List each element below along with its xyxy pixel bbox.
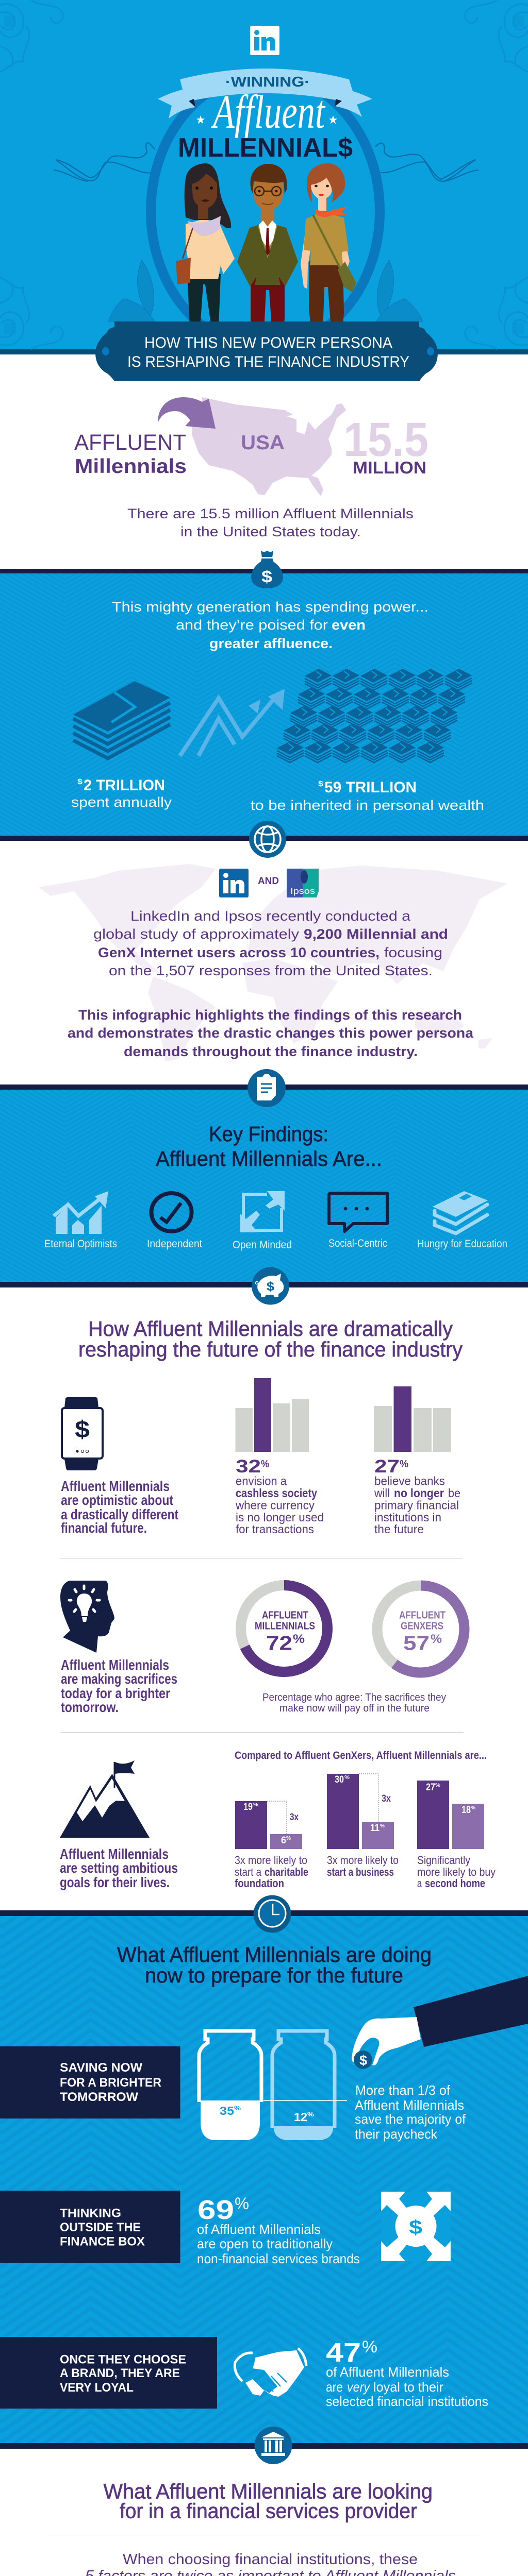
- statement: [127, 506, 414, 539]
- icon: check circle: [152, 1193, 192, 1231]
- label: Eternal Optimists: [44, 1238, 117, 1250]
- study description: LinkedIn and Ipsos recently conducted a: [130, 908, 411, 924]
- bar chart: second home: Significantly: [417, 1854, 470, 1867]
- donut: affluent millennials 72 percent: [241, 1585, 327, 1672]
- stat: 47 percent: of Affluent Millennials: [326, 2364, 449, 2380]
- panel: spending power: [0, 551, 528, 858]
- jar: 35 percent: 35: [220, 2104, 234, 2117]
- stat: cashless society: for transactions: [236, 1522, 314, 1536]
- heading: what they look for: [103, 2479, 433, 2522]
- heading text: [112, 599, 428, 651]
- stat: 47 percent: [326, 2337, 488, 2409]
- stat: 69 percent: of Affluent Millennials: [197, 2222, 321, 2237]
- bar chart: start a business: 30: [335, 1774, 344, 1785]
- stat: banks: primary financial: [374, 1498, 459, 1512]
- highlights statement: This infographic highlights the findings of this research: [78, 1007, 462, 1023]
- icon: handshake: [235, 2348, 306, 2397]
- stat: banks: %: [400, 1459, 408, 1470]
- statement: in the United States today.: [180, 524, 361, 539]
- heading text: and they’re poised for: [176, 617, 328, 633]
- icon: smart watch: $: [75, 1416, 90, 1443]
- bar chart: charitable foundation: %: [253, 1802, 258, 1808]
- icon: document: [248, 1069, 286, 1107]
- icon: large cash stack: [73, 681, 170, 758]
- usa label: USA: [241, 432, 285, 454]
- stat: 59 trillion: to be inherited in personal wealth: [251, 798, 484, 813]
- stat: 69 percent: are open to traditionally: [197, 2236, 333, 2251]
- donut: affluent genxers 57 percent: [377, 1586, 464, 1672]
- label: Open Minded: [233, 1239, 292, 1251]
- stat: 2 trillion: spent annually: [71, 794, 172, 810]
- icon: arrows outward with dollar: [381, 2192, 451, 2261]
- stat: cashless society: [235, 1456, 324, 1536]
- icon: clock: [254, 1895, 291, 1933]
- bar chart: start a business: start a business: [327, 1866, 394, 1878]
- icon: head with light bulb: [60, 1581, 114, 1653]
- usa map: [192, 397, 346, 496]
- banner: IS RESHAPING THE FINANCE INDUSTRY: [127, 353, 409, 370]
- intro text: [85, 2551, 456, 2576]
- stat: 2 trillion: 2 TRILLION: [84, 777, 165, 794]
- saving statement: their paycheck: [355, 2126, 438, 2142]
- chart title: Compared to Affluent GenXers, Affluent Millennials are...: [235, 1750, 487, 1761]
- bar chart: charitable foundation: charitable: [265, 1866, 308, 1878]
- statement: [61, 1657, 177, 1715]
- study description: GenX Internet users across 10 countries,: [98, 945, 380, 960]
- bar chart: second home: second home: [425, 1877, 485, 1890]
- heading text: greater affluence.: [209, 636, 333, 651]
- label: Independent: [147, 1238, 202, 1250]
- ornament: leaves: [108, 260, 423, 321]
- chart caption: [262, 1692, 446, 1714]
- stat: 59 trillion: [251, 779, 484, 813]
- stat: cashless society: cashless society: [236, 1486, 317, 1500]
- icon: hand with coin: [352, 1976, 528, 2069]
- bar chart: start a business: 3x more likely to: [327, 1854, 399, 1867]
- heading: What Affluent Millennials are doing: [117, 1943, 432, 1967]
- statement: Affluent Millennials: [61, 1478, 170, 1494]
- bar chart: second home: %: [435, 1783, 440, 1788]
- label box: saving now: SAVING NOW: [60, 2061, 142, 2075]
- stat: 69 percent: %: [235, 2194, 249, 2213]
- stat: 47 percent: %: [362, 2337, 377, 2356]
- bar chart: start a business: %: [344, 1775, 350, 1781]
- stat: 47 percent: very: [347, 2379, 371, 2395]
- stat: 59 trillion: 59 TRILLION: [324, 779, 417, 796]
- label box: saving now: [0, 2046, 180, 2119]
- heading: [156, 1122, 382, 1171]
- bar chart: 27 percent: [374, 1386, 451, 1452]
- bar chart: charitable foundation: %: [286, 1836, 291, 1841]
- bar chart: second home: more likely to buy: [417, 1866, 496, 1878]
- label box: loyalty: ONCE THEY CHOOSE: [60, 2352, 186, 2367]
- stat: 2 trillion: $: [77, 777, 83, 786]
- statement: tomorrow.: [61, 1699, 119, 1715]
- bar chart: charitable foundation: 19: [243, 1802, 253, 1812]
- panel: making sacrifices: [60, 1581, 464, 1715]
- label box: loyalty: A BRAND, THEY ARE: [60, 2366, 180, 2380]
- finding: hungry for education: [417, 1191, 507, 1250]
- heading: what they look for: What Affluent Millennials are looking: [103, 2479, 433, 2503]
- panel: ambitious goals: [60, 1750, 496, 1890]
- bar chart: charitable foundation: 3x: [290, 1812, 299, 1823]
- stat: 69 percent: non-financial services brands: [197, 2251, 360, 2266]
- icon: bank: [255, 2427, 292, 2464]
- panel: research study: [39, 864, 508, 1061]
- bar chart: second home: 18: [461, 1805, 471, 1816]
- header panel: [0, 0, 528, 381]
- icon: money bag: [251, 551, 283, 588]
- label box: loyalty: [0, 2337, 217, 2409]
- study description: [93, 908, 448, 978]
- saving statement: [355, 2082, 466, 2142]
- stat: cashless society: is no longer used: [236, 1511, 324, 1524]
- affluent millennials label: AFFLUENT: [74, 430, 186, 455]
- stat: cashless society: 32: [236, 1456, 261, 1477]
- donut: affluent genxers 57 percent: GENXERS: [401, 1621, 443, 1632]
- ribbon: [158, 69, 372, 118]
- label box: thinking outside: [0, 2191, 180, 2263]
- bar chart: charitable foundation: start a: [235, 1866, 262, 1878]
- stat: banks: [374, 1456, 460, 1536]
- linkedin logo: [250, 26, 279, 55]
- bar chart: second home: 27: [426, 1782, 435, 1793]
- bar chart: start a business: 3x: [382, 1793, 391, 1804]
- icon: expanding square: [240, 1191, 285, 1232]
- stat: cashless society: %: [261, 1459, 269, 1470]
- heading: reshaping the finance industry: [78, 1317, 463, 1361]
- bar chart: charitable foundation: [235, 1801, 308, 1890]
- heading: Affluent Millennials Are...: [156, 1147, 382, 1171]
- highlights statement: demands throughout the finance industry.: [124, 1044, 418, 1059]
- statement: are making sacrifices: [61, 1671, 177, 1687]
- panel: five factors: [60, 2551, 475, 2576]
- bar chart: second home: [417, 1781, 496, 1890]
- ribbon text: ·WINNING·: [225, 74, 310, 90]
- character: woman right: [301, 163, 356, 350]
- stat: banks: be: [448, 1486, 460, 1500]
- heading: now to prepare for the future: [145, 1963, 403, 1987]
- bar chart: charitable foundation: 6: [281, 1835, 286, 1846]
- stat: cashless society: envision a: [236, 1475, 287, 1488]
- stars: [196, 115, 337, 124]
- statement: goals for their lives.: [60, 1874, 170, 1890]
- script title: Affluent: [211, 86, 326, 138]
- donut: affluent genxers 57 percent: 57: [403, 1633, 430, 1655]
- stat: banks: no longer: [394, 1486, 444, 1500]
- 15.5 million: 15.5: [343, 413, 428, 466]
- bar chart: charitable foundation: 3x more likely to: [235, 1854, 307, 1867]
- stat: 47 percent: are: [326, 2379, 343, 2395]
- icon: money bag: $: [261, 567, 272, 586]
- bar chart: start a business: 11: [370, 1823, 380, 1834]
- donut: affluent millennials 72 percent: AFFLUENT: [262, 1609, 308, 1621]
- stat: banks: 27: [374, 1456, 400, 1477]
- ornament: side ribbons: [54, 143, 478, 181]
- panel: preparing for the future: [0, 1895, 528, 2464]
- statement: a drastically different: [61, 1506, 178, 1522]
- study description: on the 1,507 responses from the United States.: [109, 963, 433, 978]
- heading: reshaping the finance industry: reshaping the future of the finance industry: [78, 1337, 463, 1361]
- affluent millennials label: Millennials: [75, 455, 187, 478]
- heading text: This mighty generation has spending power...: [112, 599, 428, 615]
- bar chart: second home: %: [471, 1805, 475, 1811]
- and label: AND: [258, 876, 279, 887]
- icon: piggy bank: $: [267, 1280, 275, 1294]
- stat: banks: believe banks: [374, 1475, 445, 1488]
- jar: 12 percent: [272, 2031, 335, 2140]
- intro text: When choosing financial institutions, these: [123, 2551, 418, 2568]
- stat: banks: will: [374, 1486, 390, 1500]
- stat: 47 percent: selected financial institutions: [326, 2394, 488, 2409]
- icon: grid of cash stacks: [277, 669, 472, 762]
- stat: 47 percent: loyal to their: [373, 2379, 443, 2395]
- finding: independent: [147, 1193, 202, 1250]
- oval frame: [151, 74, 380, 348]
- stat: 69 percent: [197, 2194, 360, 2266]
- label box: saving now: FOR A BRIGHTER: [60, 2076, 161, 2090]
- saving statement: Affluent Millennials: [355, 2097, 464, 2113]
- jar: 12 percent: 12: [294, 2110, 307, 2124]
- jar: 12 percent: %: [307, 2111, 314, 2118]
- statement: are setting ambitious: [60, 1860, 178, 1876]
- stat: 2 trillion: [71, 777, 172, 810]
- heading: Key Findings:: [209, 1122, 328, 1146]
- donut: affluent millennials 72 percent: %: [293, 1632, 305, 1646]
- study description: global study of approximately: [93, 926, 300, 942]
- bar chart: start a business: %: [380, 1823, 385, 1829]
- stat: 69 percent: 69: [197, 2195, 234, 2225]
- panel: key findings: [0, 1069, 528, 1304]
- chart caption: make now will pay off in the future: [279, 1703, 430, 1714]
- label box: thinking outside: THINKING: [60, 2207, 121, 2221]
- finding: social-centric: [328, 1193, 387, 1249]
- bar chart: 32 percent: [235, 1378, 309, 1452]
- icon: speech tablet: [329, 1193, 387, 1231]
- saving statement: More than 1/3 of: [355, 2082, 451, 2098]
- icon: books: [433, 1191, 488, 1233]
- icon: smart watch: [62, 1397, 103, 1470]
- character: man: [237, 164, 298, 351]
- label box: thinking outside: OUTSIDE THE: [60, 2221, 141, 2234]
- donut: affluent genxers 57 percent: %: [431, 1632, 442, 1646]
- banner text: HOW THIS NEW POWER PERSONA: [144, 334, 392, 351]
- stat: banks: the future: [374, 1522, 424, 1536]
- label box: saving now: TOMORROW: [60, 2090, 138, 2104]
- icon: globe: [249, 821, 286, 858]
- finding: eternal optimists: [44, 1191, 117, 1250]
- icon: piggy bank: [252, 1267, 289, 1304]
- icon: mountain with flag: [60, 1760, 150, 1838]
- saving statement: save the majority of: [355, 2111, 466, 2127]
- character: woman left: [176, 163, 235, 328]
- statement: [60, 1846, 178, 1890]
- panel: optimistic about future: [61, 1378, 460, 1536]
- heading text: even: [332, 617, 366, 633]
- world map: [39, 864, 508, 1061]
- study description: focusing: [384, 945, 442, 960]
- icon: arrows outward with dollar: $: [409, 2217, 422, 2239]
- donut: affluent genxers 57 percent: AFFLUENT: [399, 1609, 446, 1621]
- chart caption: Percentage who agree: The sacrifices they: [262, 1692, 446, 1703]
- statement: There are 15.5 million Affluent Millennials: [127, 506, 414, 521]
- ornaments: corner flourishes: [0, 0, 528, 349]
- study description: 9,200 Millennial and: [304, 926, 448, 942]
- heading: what they look for: for in a financial services provider: [120, 2499, 417, 2522]
- statement: are optimistic about: [61, 1492, 173, 1508]
- title: millennials: MILLENNIAL$: [178, 133, 353, 163]
- jar: 35 percent: [199, 2031, 261, 2140]
- linkedin logo: [219, 869, 249, 897]
- banner: [95, 321, 438, 381]
- panel: usa statistic: [74, 397, 428, 539]
- label box: thinking outside: FINANCE BOX: [60, 2235, 145, 2248]
- stat: banks: institutions in: [374, 1511, 441, 1524]
- stat: 59 trillion: $: [318, 779, 324, 788]
- statement: [61, 1478, 178, 1536]
- statement: Affluent Millennials: [60, 1846, 169, 1862]
- affluent millennials label: [74, 430, 187, 478]
- bar chart: second home: a: [417, 1877, 422, 1890]
- statement: financial future.: [61, 1520, 147, 1536]
- statement: today for a brighter: [61, 1685, 170, 1701]
- stat: 47 percent: 47: [326, 2338, 361, 2368]
- highlights statement: and demonstrates the drastic changes this power persona: [68, 1025, 474, 1041]
- donut: affluent millennials 72 percent: MILLENNIALS: [255, 1621, 315, 1632]
- arrow: [158, 397, 216, 429]
- statement: Affluent Millennials: [61, 1657, 169, 1673]
- ipsos logo: Ipsos: [290, 886, 315, 896]
- heading: reshaping the finance industry: How Affluent Millennials are dramatically: [88, 1317, 453, 1341]
- icon: growth arrow: [180, 689, 285, 756]
- heading: [117, 1943, 432, 1987]
- stat: cashless society: where currency: [235, 1498, 315, 1512]
- label: Social-Centric: [328, 1238, 387, 1249]
- label box: loyalty: VERY LOYAL: [60, 2381, 134, 2395]
- icon: chart: [54, 1191, 108, 1234]
- finding: open minded: [233, 1191, 292, 1251]
- bar chart: start a business: [327, 1774, 399, 1878]
- icon: hand with coin: $: [359, 2053, 367, 2068]
- donut: affluent millennials 72 percent: 72: [266, 1633, 292, 1655]
- ipsos logo: [287, 869, 319, 897]
- label: Hungry for Education: [417, 1238, 507, 1250]
- jar: 35 percent: %: [234, 2105, 241, 2112]
- 15.5 million: MILLION: [353, 458, 426, 477]
- highlights statement: [68, 1007, 474, 1059]
- bar chart: charitable foundation: foundation: [235, 1877, 284, 1890]
